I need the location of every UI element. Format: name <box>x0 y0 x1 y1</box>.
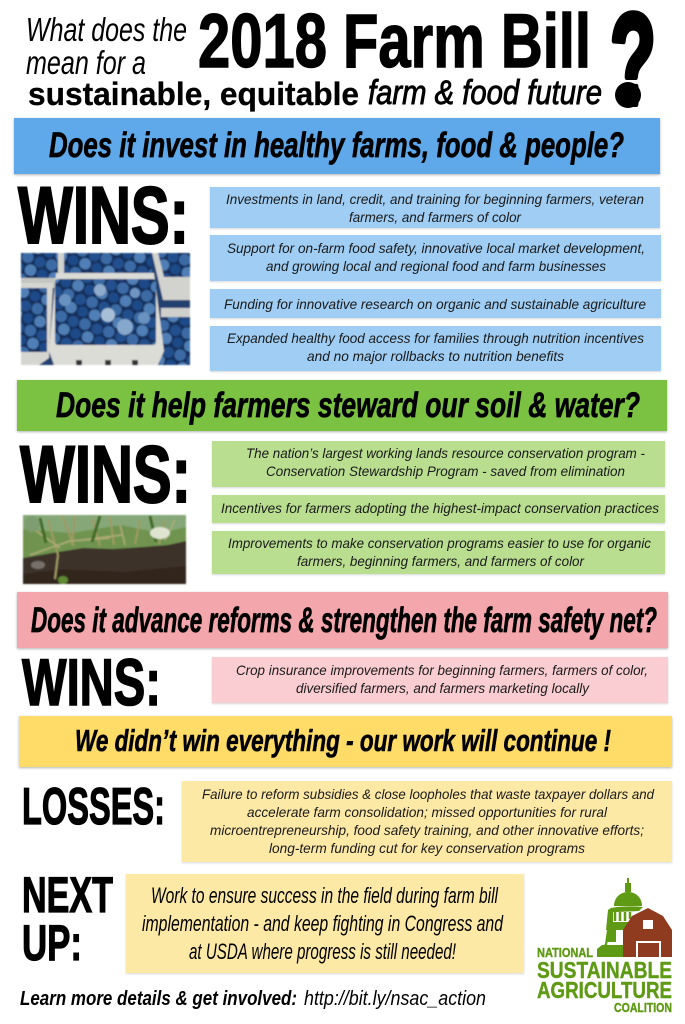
win: food safety, local markets: and growing local and regional food and farm businesses <box>266 258 606 274</box>
panel: losses: accelerate farm consolidation; missed opportunities for rural <box>247 804 608 820</box>
win: land, credit, training <box>210 187 660 228</box>
photo: blueberries <box>21 253 190 365</box>
panel: farm safety net win: diversified farmers, and farmers marketing locally <box>296 680 590 696</box>
win: conservation stewardship program: Conservation Stewardship Program - saved from elimination <box>266 463 625 479</box>
icon: red barn <box>623 908 672 957</box>
win: organic research <box>210 289 661 318</box>
panel: healthy farms heading <box>14 118 660 174</box>
panel: next up: implementation - and keep fighting in Congress and <box>142 911 504 936</box>
win: conservation incentives: Incentives for farmers adopting the highest-impact conservation practices <box>221 500 659 516</box>
panel: next up: Work to ensure success in the field during farm bill <box>151 883 499 908</box>
title <box>26 0 656 132</box>
panel: losses: long-term funding cut for key conservation programs <box>269 840 585 856</box>
footer call to action: http://bit.ly/nsac_action <box>304 988 486 1010</box>
win: conservation incentives <box>212 495 665 523</box>
LOSSES label: LOSSES: <box>22 778 165 836</box>
win: healthy food access: and no major rollbacks to nutrition benefits <box>307 348 564 364</box>
panel: losses: microentrepreneurship, food safety training, and other innovative efforts; <box>210 822 644 838</box>
title question mark <box>610 0 656 132</box>
logo: National Sustainable Agriculture Coalition <box>537 878 672 1015</box>
win: easier programs: Improvements to make conservation programs easier to use for organic <box>228 535 651 551</box>
NEXT UP label: UP: <box>22 915 82 971</box>
win: organic research: Funding for innovative research on organic and sustainable agriculture <box>224 296 646 312</box>
icon: capitol building <box>597 878 643 957</box>
WINS label 3: WINS: <box>22 645 161 719</box>
win: easier programs: farmers, beginning farmers, and farmers of color <box>297 553 585 569</box>
win: healthy food access: Expanded healthy food access for families through nutrition incentives <box>227 330 644 346</box>
win: food safety, local markets <box>210 235 661 281</box>
panel: next up: at USDA where progress is still needed! <box>189 939 456 964</box>
panel: farm safety net heading <box>17 592 668 648</box>
win: easier programs <box>212 531 665 574</box>
panel: farm safety net win <box>212 657 668 703</box>
panel: work will continue heading <box>19 716 672 767</box>
win: conservation stewardship program <box>212 441 665 487</box>
logo wordmark: NATIONAL <box>537 945 593 960</box>
NEXT UP label <box>22 867 113 971</box>
photo: soil and plants <box>23 515 186 584</box>
WINS label 2: WINS: <box>20 430 191 520</box>
win: land, credit, training: farmers, and farmers of color <box>349 209 522 225</box>
panel: healthy farms wins <box>210 187 661 371</box>
win: land, credit, training: Investments in land, credit, and training for beginning farmers, veteran <box>226 191 644 207</box>
title lead-in: mean for a: mean for a <box>26 44 146 81</box>
win: food safety, local markets: Support for on-farm food safety, innovative local market development, <box>227 240 645 256</box>
panel: farm safety net win: Crop insurance improvements for beginning farmers, farmers of color, <box>236 662 648 678</box>
title lead-in: what does the: What does the <box>26 11 187 48</box>
panel: next up <box>126 874 524 973</box>
logo wordmark <box>537 945 672 1015</box>
NEXT UP label: NEXT <box>22 867 113 923</box>
WINS label 1: WINS: <box>18 171 189 261</box>
footer call to action: Learn more details & get involved: <box>20 988 297 1010</box>
panel: losses <box>182 781 672 862</box>
title: sustainable, equitable: sustainable, equitable <box>28 76 359 112</box>
logo wordmark: COALITION <box>614 1000 672 1015</box>
win: conservation stewardship program: The nation’s largest working lands resource conservation program - <box>246 445 645 461</box>
title: farm and food future: farm & food future <box>368 74 602 112</box>
win: healthy food access <box>210 326 661 371</box>
panel: losses: Failure to reform subsidies & close loopholes that waste taxpayer dollars and <box>202 786 655 802</box>
panel: soil and water wins <box>212 441 665 574</box>
